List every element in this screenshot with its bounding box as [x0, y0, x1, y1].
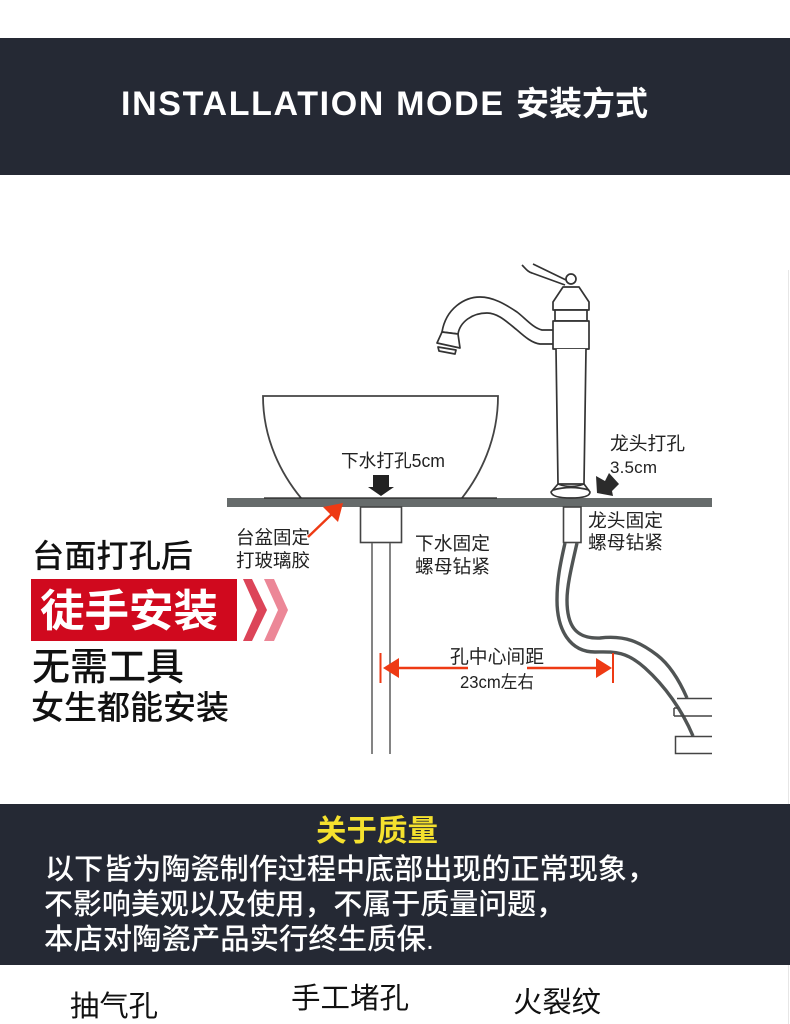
- caption: fire crack: 火裂纹: [513, 986, 601, 1019]
- callout line 1: 台面打孔后: [32, 538, 193, 574]
- countertop: [227, 498, 712, 507]
- header band: [0, 38, 790, 175]
- callout line 3: 女生都能安装: [31, 689, 229, 726]
- red banner: [31, 579, 237, 641]
- label: faucet nut: 龙头固定: [588, 510, 663, 531]
- label: drain nut: 下水固定: [415, 533, 490, 554]
- quality notice band: [0, 804, 790, 965]
- caption: vent hole: 抽气孔: [70, 990, 158, 1023]
- label: faucet hole: 3.5cm: [610, 458, 657, 477]
- quality text: 以下皆为陶瓷制作过程中底部出现的正常现象，: [45, 853, 656, 886]
- banner text: 徒手安装: [40, 587, 218, 636]
- water valve: [674, 698, 712, 754]
- arrow: faucet hole: [596, 473, 619, 496]
- drain nut and pipe: [360, 507, 402, 754]
- label: hole spacing: 孔中心间距: [450, 646, 544, 668]
- diagram: wash basin installation: [227, 264, 712, 754]
- label: drain nut: 螺母钻紧: [415, 556, 490, 577]
- faucet base: [551, 484, 590, 498]
- chevrons: [243, 579, 288, 641]
- label: basin glue: 打玻璃胶: [236, 550, 310, 571]
- label: basin glue: [236, 527, 310, 571]
- faucet handle: [522, 264, 566, 285]
- label: faucet nut: 螺母钻紧: [588, 532, 663, 553]
- label: faucet hole: 龙头打孔: [610, 433, 685, 454]
- arrow: hole spacing dimension: [380, 653, 614, 683]
- caption: hand plug: 手工堵孔: [291, 982, 409, 1015]
- label: faucet nut: [588, 510, 663, 553]
- quality text: 不影响美观以及使用，不属于质量问题，: [44, 888, 565, 921]
- quality heading: 关于质量: [316, 815, 438, 848]
- label: drain hole: 下水打孔5cm: [341, 451, 445, 471]
- title: 安装方式: [516, 85, 648, 122]
- label: hole spacing: [450, 646, 544, 692]
- basin bowl: [263, 396, 498, 498]
- label: hole spacing: 23cm左右: [460, 672, 534, 692]
- faucet spout: [442, 297, 553, 344]
- faucet cap: [553, 287, 589, 310]
- arrow: sealant: [308, 503, 343, 537]
- supply hose: [557, 543, 693, 736]
- callout line 2: 无需工具: [32, 647, 184, 689]
- callout: no-tool install: [31, 538, 288, 726]
- label: faucet hole: [610, 433, 685, 477]
- faucet: [437, 264, 590, 498]
- faucet column: [556, 349, 586, 484]
- quality text: 本店对陶瓷产品实行终生质保.: [44, 923, 434, 956]
- quality text: [44, 853, 656, 956]
- label: basin glue: 台盆固定: [236, 527, 310, 548]
- label: drain nut: [415, 533, 490, 577]
- title: INSTALLATION MODE: [121, 85, 503, 123]
- faucet nut: [564, 507, 581, 542]
- arrow: drain hole: [368, 475, 394, 496]
